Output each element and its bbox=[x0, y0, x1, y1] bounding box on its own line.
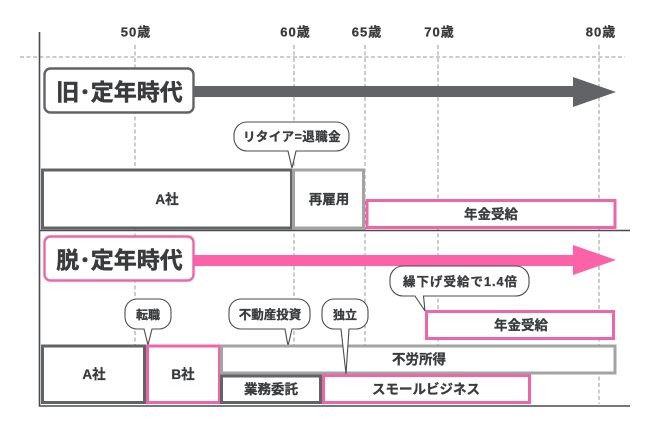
callout: retire equals severance pay: リタイア=退職金 bbox=[243, 129, 341, 144]
callout: job change: 転職 bbox=[136, 307, 160, 322]
heading: post retirement era bbox=[44, 236, 194, 280]
callout: real estate investment: 不動産投資 bbox=[239, 307, 302, 322]
age axis labels bbox=[121, 24, 616, 40]
callout: deferred pension 1.4x bbox=[390, 266, 529, 311]
age axis labels: 60歳 bbox=[280, 24, 311, 40]
arrow: post retirement era bbox=[190, 245, 616, 275]
box: contract work: 業務委託 bbox=[244, 381, 298, 397]
callout: real estate investment bbox=[229, 299, 310, 346]
box: contract work bbox=[222, 376, 320, 402]
callout: deferred pension 1.4x: 繰下げ受給で1.4倍 bbox=[403, 274, 518, 289]
box: small business: スモールビジネス bbox=[372, 381, 480, 397]
age axis labels: 65歳 bbox=[352, 24, 382, 40]
box: company B bbox=[148, 346, 220, 402]
callout: going independent bbox=[322, 299, 368, 374]
chart axis lines bbox=[39, 32, 630, 406]
box: passive income: 不労所得 bbox=[392, 351, 446, 367]
callout: going independent: 独立 bbox=[333, 307, 357, 322]
box: re-employment bbox=[294, 170, 364, 228]
box: pension (new) bbox=[426, 312, 614, 338]
box: pension (old) bbox=[367, 200, 615, 228]
heading: old retirement era bbox=[44, 68, 194, 112]
callout: retire equals severance pay bbox=[234, 122, 349, 168]
box: company A (new): A社 bbox=[82, 366, 106, 382]
box: passive income bbox=[222, 346, 615, 373]
box: pension (new): 年金受給 bbox=[494, 317, 548, 333]
age axis labels: 70歳 bbox=[424, 24, 455, 40]
age axis labels: 50歳 bbox=[121, 24, 151, 40]
box: company B: B社 bbox=[171, 366, 195, 382]
box: company A (old): A社 bbox=[155, 191, 179, 207]
box: small business bbox=[324, 376, 530, 402]
heading: old retirement era: 旧･定年時代 bbox=[56, 79, 183, 105]
callout: job change bbox=[125, 299, 171, 345]
arrow: old retirement era bbox=[190, 77, 616, 107]
heading: post retirement era: 脱･定年時代 bbox=[56, 247, 183, 273]
box: re-employment: 再雇用 bbox=[309, 192, 349, 207]
box: pension (old): 年金受給 bbox=[464, 206, 518, 222]
box: company A (new) bbox=[42, 346, 144, 402]
box: company A (old) bbox=[42, 170, 292, 228]
age axis labels: 80歳 bbox=[586, 24, 616, 40]
